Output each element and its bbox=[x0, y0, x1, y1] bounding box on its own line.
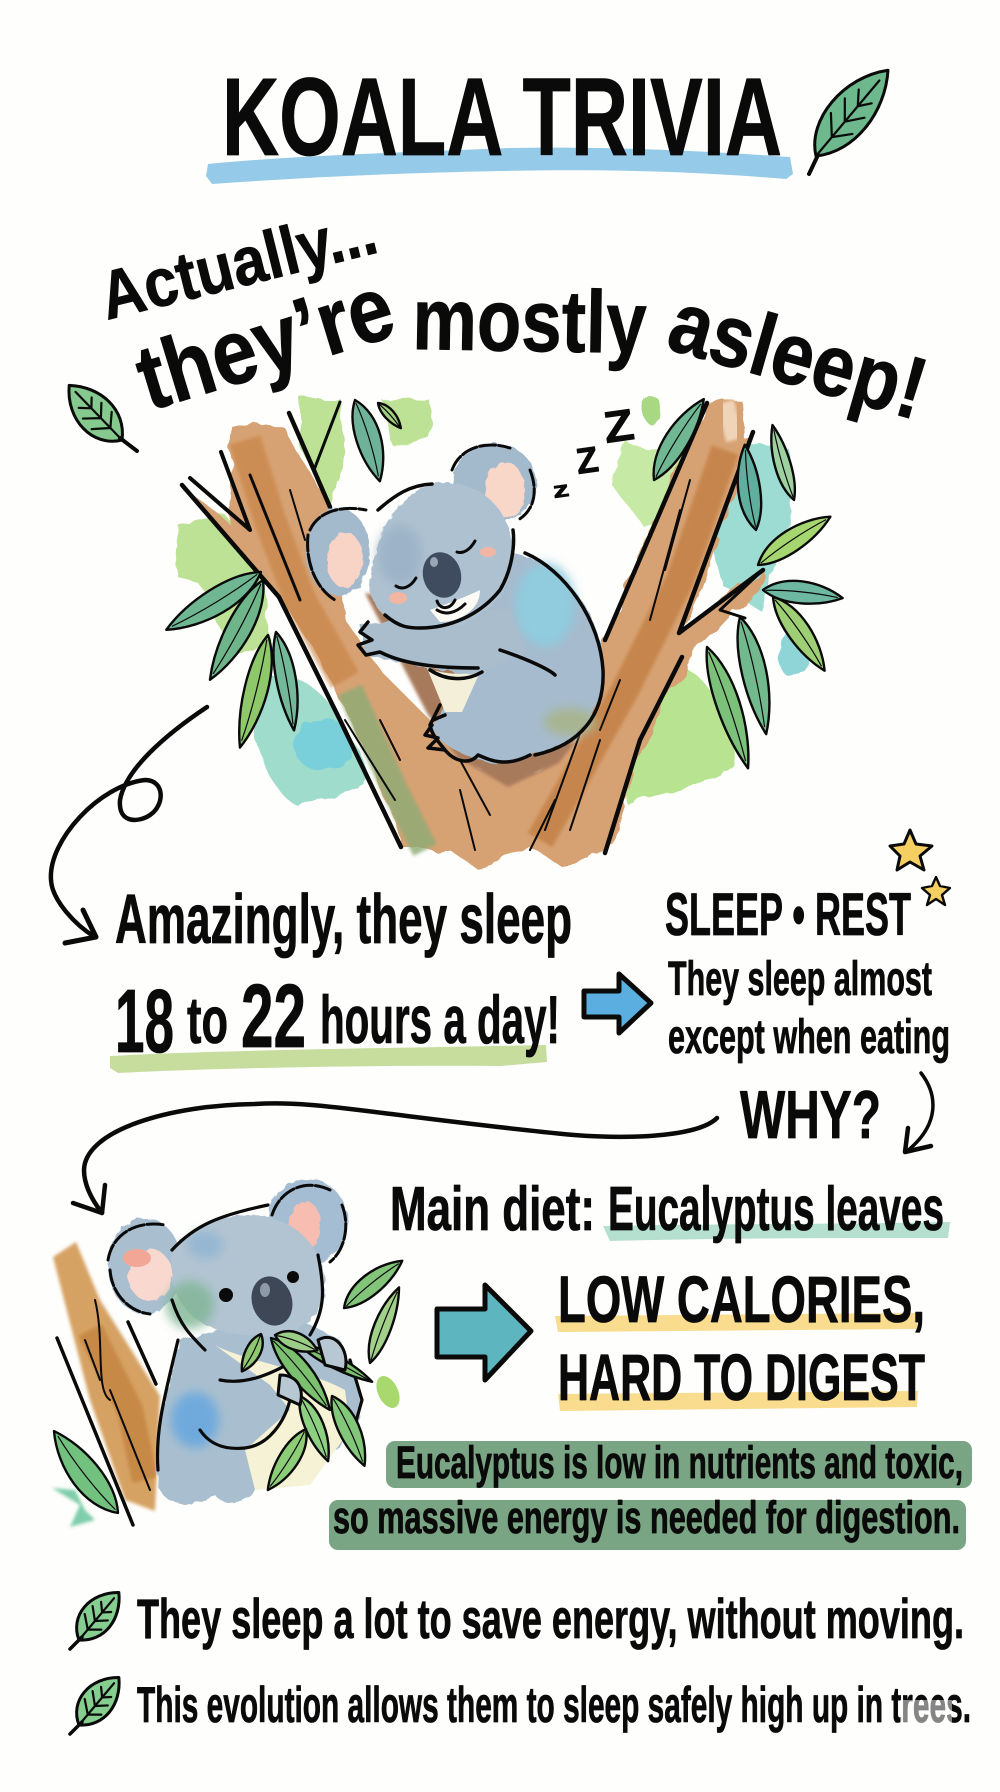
arrow: small down arrow bbox=[905, 1073, 933, 1152]
green highlight bbox=[603, 1222, 950, 1241]
text: main diet bbox=[390, 1175, 950, 1244]
sleeping zzz bbox=[551, 400, 637, 503]
koala body bbox=[157, 1320, 362, 1504]
leaves held and around bbox=[236, 1252, 408, 1496]
text: 18 to 22 hours a day: 18 bbox=[115, 972, 174, 1072]
text: they sleep almost except when eating bbox=[668, 953, 950, 1064]
title underline brush stroke bbox=[206, 148, 793, 184]
heading: they're mostly asleep: they’re bbox=[125, 256, 405, 430]
sleeping zzz: Z bbox=[601, 400, 637, 453]
tree outline strokes bbox=[182, 402, 763, 853]
text: 18 to 22 hours a day: hours a day! bbox=[320, 982, 560, 1058]
green highlight bbox=[110, 1045, 547, 1073]
sleeping zzz: Z bbox=[573, 438, 601, 482]
text: 18 to 22 hours a day bbox=[110, 967, 560, 1073]
eucalyptus leaves bbox=[161, 392, 844, 771]
text: 18 to 22 hours a day: to bbox=[187, 983, 228, 1057]
arrow: teal block arrow bbox=[437, 1285, 531, 1380]
text block: green highlighted explanation bbox=[329, 1437, 972, 1550]
yellow highlights bbox=[555, 1313, 918, 1332]
small trunk bbox=[53, 1242, 160, 1525]
text: low calories hard to digest bbox=[555, 1262, 925, 1414]
illustration: sleeping koala in tree bbox=[161, 392, 844, 872]
icon: bullet leaf bbox=[66, 1582, 130, 1650]
koala head bbox=[306, 443, 536, 628]
koala body bbox=[358, 553, 603, 763]
illustration: koala eating eucalyptus bbox=[41, 1179, 408, 1527]
heading: they're mostly asleep: mostly bbox=[412, 269, 647, 372]
heading: Actually: Actually... bbox=[92, 193, 384, 335]
teal blob at base bbox=[52, 1488, 95, 1527]
text: 18 to 22 hours a day: 22 bbox=[241, 967, 306, 1067]
heading: they're mostly asleep: asleep! bbox=[659, 271, 938, 438]
icon: bullet leaf bbox=[66, 1667, 130, 1735]
arrow: curly loop arrow to sleep text bbox=[51, 707, 207, 943]
title: KOALA TRIVIA with underline and leaf bbox=[206, 56, 903, 184]
arrow: blue block arrow bbox=[584, 974, 651, 1033]
arrow: long wavy arrow bbox=[73, 1103, 717, 1213]
icon: stars bbox=[890, 830, 950, 905]
title text: KOALA TRIVIA bbox=[222, 56, 782, 179]
tree trunk V bbox=[182, 399, 767, 872]
icon: small leaf left bbox=[55, 373, 137, 454]
heading: they're mostly asleep bbox=[125, 256, 938, 438]
text: amazingly they sleep: Amazingly, they sleep bbox=[115, 880, 572, 958]
koala head and ears bbox=[108, 1179, 348, 1350]
sleeping zzz: z bbox=[551, 476, 571, 503]
watercolor foliage blobs bbox=[176, 396, 806, 808]
text: main diet: Main diet: bbox=[390, 1175, 595, 1244]
bottom-left leaf bbox=[41, 1423, 128, 1523]
icon: title leaf bbox=[799, 56, 903, 174]
text: why: WHY? bbox=[740, 1077, 881, 1153]
